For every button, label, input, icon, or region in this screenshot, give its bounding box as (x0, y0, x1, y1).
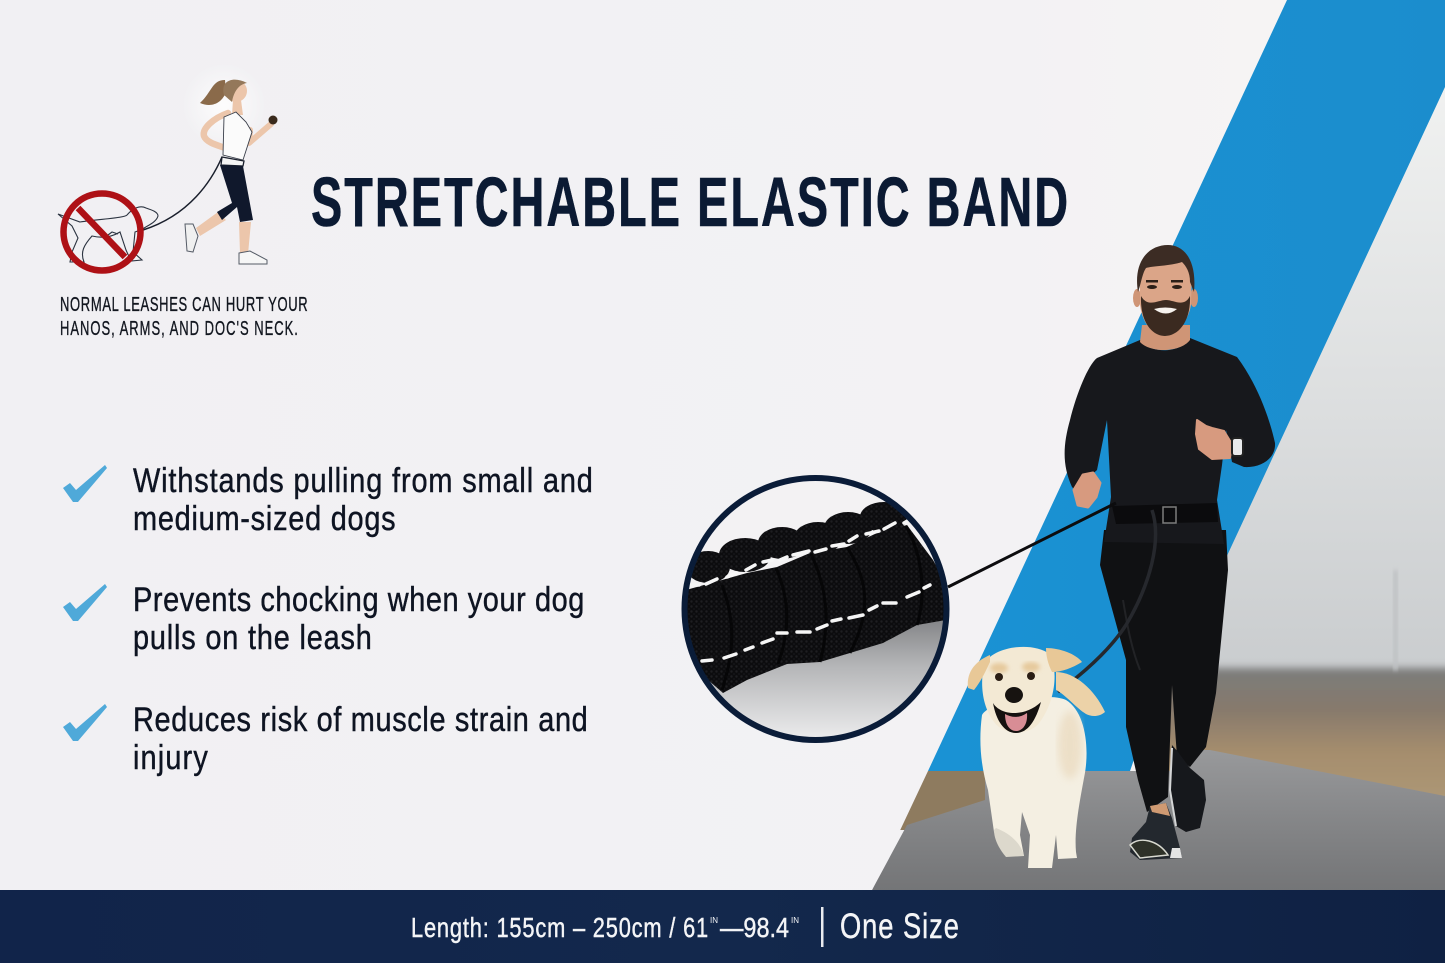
body (980, 697, 1087, 868)
bullet: withstands pulling (63, 461, 593, 538)
nose (1005, 687, 1023, 703)
length text: —98.4 (720, 912, 789, 943)
tail (1056, 672, 1105, 716)
icon: check mark (63, 584, 107, 621)
caption: normal leashes warning: HANOS, ARMS, AND DOC'S NECK. (60, 317, 298, 340)
hair (1137, 245, 1194, 292)
illustration: man running (1065, 245, 1275, 860)
neck (1140, 325, 1190, 350)
divider (821, 907, 824, 947)
icon: check mark (63, 465, 107, 502)
bullet: prevents chocking (63, 580, 584, 657)
reflective dashes (691, 520, 930, 661)
lens ring (684, 478, 946, 740)
callout: elastic band close-up (684, 478, 950, 745)
illustration: labrador dog (968, 647, 1105, 868)
bullet: prevents chocking: pulls on the leash (133, 618, 372, 657)
bullet: reduces risk: Reduces risk of muscle strain and (133, 700, 588, 739)
body shading (1058, 711, 1082, 779)
icon: check mark (63, 704, 107, 741)
footer bar (0, 890, 1445, 963)
smile (1154, 308, 1177, 314)
rope body (686, 525, 946, 693)
torso and arms (1065, 338, 1275, 544)
tongue (1005, 713, 1027, 731)
hand left (1074, 473, 1100, 507)
length text: Length: 155cm – 250cm / 61 (411, 912, 708, 944)
length text: IN (710, 916, 718, 925)
ears (1133, 289, 1141, 307)
beard (1141, 296, 1190, 336)
face (1140, 258, 1192, 336)
hand right (1196, 420, 1232, 459)
eyes (1146, 280, 1183, 289)
head (982, 647, 1055, 732)
rope back lumps (686, 502, 908, 583)
rope folds (722, 526, 922, 690)
bullet: withstands pulling: Withstands pulling from small and (133, 461, 593, 500)
caption: normal leashes warning: NORMAL LEASHES CAN HURT YOUR (60, 293, 308, 316)
mouth (993, 702, 1041, 733)
leash to waist (948, 503, 1116, 587)
caption: normal leashes warning (60, 293, 308, 340)
shoes (1130, 745, 1206, 860)
icon: dog line drawing (58, 207, 158, 262)
waist leash strap (1058, 510, 1156, 692)
bullet: reduces risk (63, 700, 588, 777)
length text: IN (791, 916, 799, 925)
floor shadow (711, 620, 943, 737)
size text: One Size (840, 907, 959, 946)
bullet: withstands pulling: medium-sized dogs (133, 499, 396, 538)
ears (968, 648, 1082, 690)
watch (1232, 438, 1243, 456)
bullet: reduces risk: injury (133, 738, 208, 777)
brow shading (990, 662, 1040, 673)
icon: runner with prohibited dog leash (58, 63, 278, 270)
eyes (995, 672, 1035, 681)
bullet: prevents chocking: Prevents chocking when your dog (133, 580, 584, 619)
panel: blue diagonal band (928, 0, 1445, 771)
title: STRETCHABLE ELASTIC BAND (311, 163, 1068, 241)
icon: prohibition sign (64, 194, 140, 270)
panel: roadside photo background (860, 80, 1445, 890)
pants (1100, 530, 1228, 812)
